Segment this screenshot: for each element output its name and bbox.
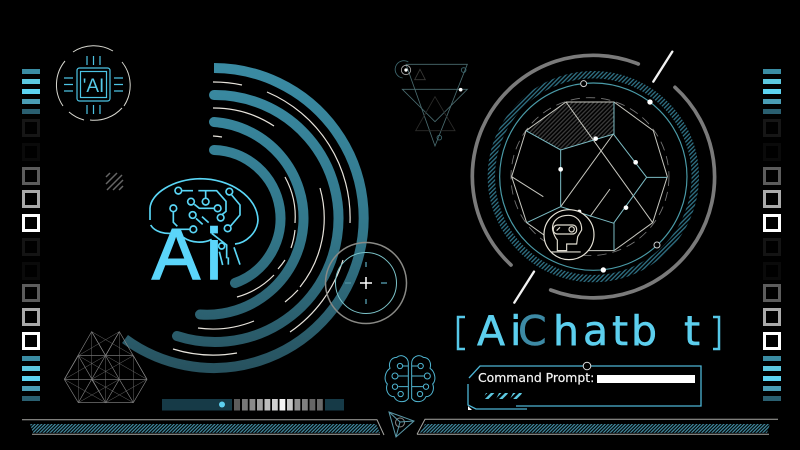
mesh hexagon (64, 332, 147, 403)
hatched facet (526, 102, 614, 150)
command prompt box: Command Prompt: (478, 370, 594, 385)
hatched ring (491, 75, 695, 279)
left indicator column (22, 69, 40, 401)
bottom right bar (417, 419, 778, 434)
thin white arcs (173, 82, 350, 355)
icon: AI chip (56, 46, 130, 120)
dashed ring (511, 98, 669, 256)
AI text: Ai (152, 215, 222, 295)
title: AiChatbot: i (510, 307, 521, 355)
target reticle (326, 242, 406, 324)
title: AiChatbot: h (553, 307, 579, 355)
hollow nodes (581, 81, 660, 248)
title: AiChatbot: b (631, 307, 657, 355)
icon: AI chip: 'AI (83, 76, 104, 97)
progress bar (162, 399, 344, 410)
title: AiChatbot: t (684, 307, 700, 355)
teal ring (500, 83, 687, 270)
title: AiChatbot: t (612, 307, 628, 355)
title: AiChatbot: a (583, 307, 608, 355)
brain circuit icon (150, 179, 258, 265)
icon: small brain (385, 356, 435, 402)
title: AiChatbot: C (518, 307, 547, 355)
polygon mesh (512, 102, 667, 251)
triangle emblem (395, 61, 467, 146)
title: AiChatbot: A (477, 307, 505, 355)
icon: bottom triangle (389, 412, 414, 437)
polygon sphere radar (472, 52, 715, 303)
concentric teal arcs (125, 68, 364, 368)
slash marks (514, 52, 672, 303)
bottom left bar (22, 420, 384, 435)
white nodes (558, 99, 653, 273)
icon: visor head (544, 210, 594, 260)
icon: hatched square (106, 173, 123, 190)
right indicator column (763, 69, 781, 401)
command prompt box (468, 362, 701, 410)
title: AiChatbot (458, 307, 719, 355)
outer gray ring (472, 55, 715, 298)
